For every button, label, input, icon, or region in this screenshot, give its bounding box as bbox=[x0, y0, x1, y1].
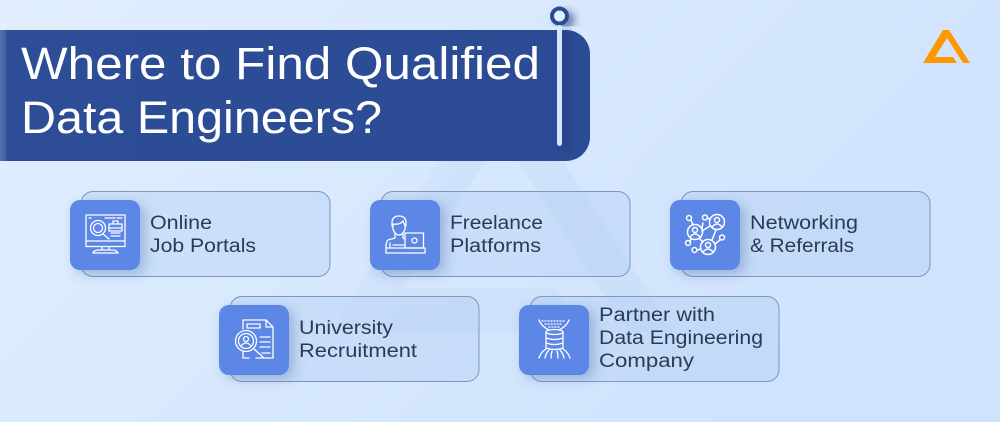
label: Platforms bbox=[450, 236, 541, 257]
label bbox=[299, 318, 418, 362]
title: Where to Find Qualified bbox=[21, 38, 540, 89]
label: & Referrals bbox=[750, 236, 854, 257]
card: Freelance Platforms bbox=[370, 192, 630, 276]
label: Freelance bbox=[450, 213, 543, 234]
title banner bbox=[0, 30, 590, 161]
label: Company bbox=[599, 351, 695, 372]
icon: monitor with search bbox=[86, 215, 125, 253]
label bbox=[450, 213, 543, 257]
label: Job Portals bbox=[150, 236, 256, 257]
title: Data Engineers? bbox=[21, 92, 382, 143]
card: Networking & Referrals bbox=[670, 192, 930, 276]
icon: database with data streams bbox=[539, 320, 570, 358]
card: University Recruitment bbox=[219, 296, 479, 382]
card: Online Job Portals bbox=[70, 192, 330, 276]
label bbox=[599, 305, 763, 372]
label bbox=[750, 213, 858, 257]
icon: freelancer at laptop bbox=[386, 216, 425, 253]
logo bbox=[923, 30, 970, 63]
label: Data Engineering bbox=[599, 328, 763, 349]
background watermark triangle bbox=[330, 64, 674, 332]
card: Partner with Data Engineering Company bbox=[519, 296, 779, 382]
label: Recruitment bbox=[299, 341, 418, 362]
icon: network of people bbox=[686, 214, 724, 254]
title bbox=[21, 38, 540, 143]
label: Partner with bbox=[599, 305, 715, 326]
label bbox=[150, 213, 256, 257]
label: Networking bbox=[750, 213, 858, 234]
icon: document with magnifier bbox=[236, 320, 273, 358]
pin decoration bbox=[552, 8, 567, 146]
label: University bbox=[299, 318, 394, 339]
label: Online bbox=[150, 213, 212, 234]
